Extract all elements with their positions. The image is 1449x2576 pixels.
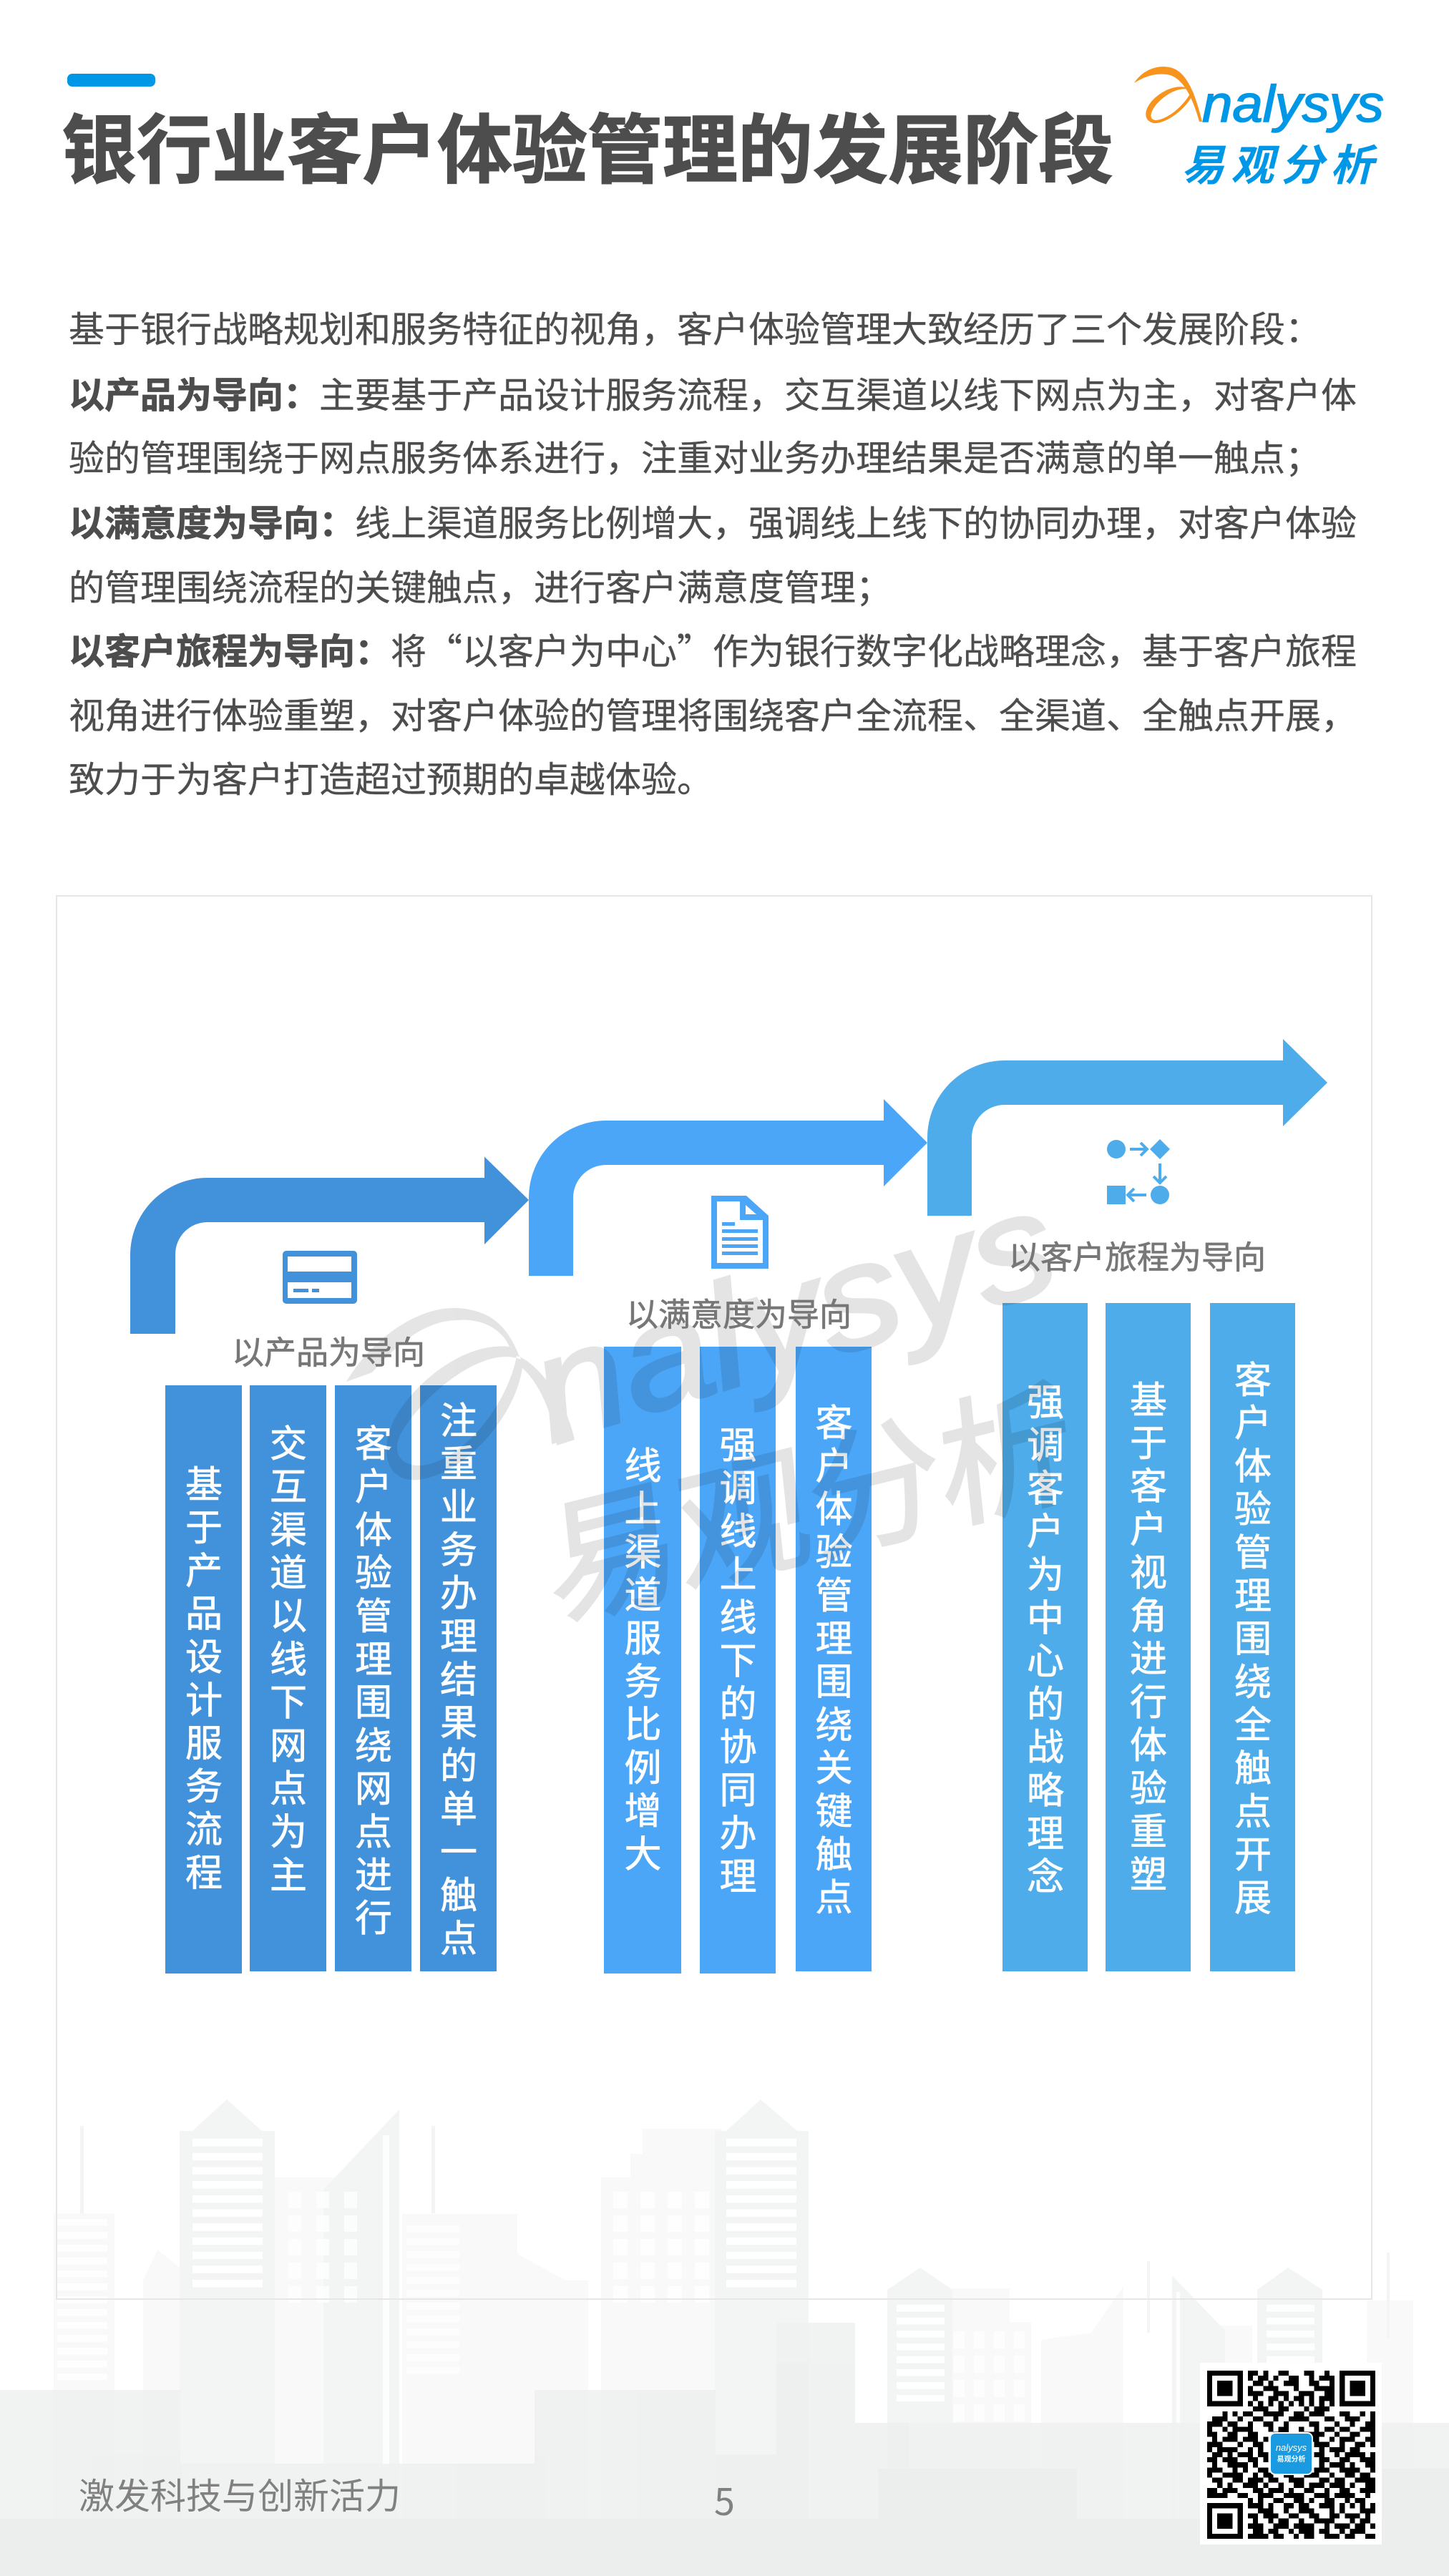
intro text block: 以客户旅程为导向：将“以客户为中心”作为银行数字化战略理念，基于客户旅程	[69, 623, 1357, 675]
intro text block: 视角进行体验重塑，对客户体验的管理将围绕客户全流程、全渠道、全触点开展，	[69, 688, 1357, 739]
bar: 客户体验管理围绕网点进行	[335, 1385, 411, 1971]
bar: 基于产品设计服务流程	[165, 1385, 242, 1974]
accent bar	[67, 74, 155, 87]
bar: 强调客户为中心的战略理念	[1002, 1303, 1088, 1971]
bar: 客户体验管理围绕网点进行: 客户体验管理围绕网点进行	[346, 1424, 401, 1942]
page number: 5	[714, 2472, 735, 2526]
bar: 基于产品设计服务流程: 基于产品设计服务流程	[177, 1465, 230, 1896]
bars: stage 2	[604, 1347, 872, 1974]
intro text block: 致力于为客户打造超过预期的卓越体验。	[69, 751, 713, 803]
intro text block: 验的管理围绕于网点服务体系进行，注重对业务办理结果是否满意的单一触点；	[69, 430, 1321, 482]
QR centre logo	[1271, 2434, 1312, 2474]
icon: card	[283, 1251, 357, 1304]
intro text block: 的管理围绕流程的关键触点，进行客户满意度管理；	[69, 560, 892, 611]
title: 银行业客户体验管理的发展阶段	[62, 90, 1113, 199]
logo: Analysys 易观分析	[1134, 67, 1384, 193]
panel: development stages frame	[56, 895, 1372, 2300]
logo: Analysys 易观分析: 易观分析	[1181, 131, 1378, 193]
bar: 线上渠道服务比例增大	[604, 1347, 681, 1974]
icon: document	[711, 1196, 769, 1269]
label: 以产品为导向: 以产品为导向	[232, 1327, 425, 1373]
bar: 交互渠道以线下网点为主: 交互渠道以线下网点为主	[262, 1424, 315, 1898]
label: 以满意度为导向: 以满意度为导向	[626, 1289, 852, 1335]
bar: 基于客户视角进行体验重塑: 基于客户视角进行体验重塑	[1122, 1380, 1175, 1898]
QR centre logo: nalysys	[1276, 2442, 1307, 2453]
bar: 强调客户为中心的战略理念: 强调客户为中心的战略理念	[1019, 1382, 1072, 1901]
icon: process flow	[1107, 1139, 1170, 1204]
bar: 基于客户视角进行体验重塑	[1106, 1303, 1191, 1971]
intro text block: 基于银行战略规划和服务特征的视角，客户体验管理大致经历了三个发展阶段：	[69, 301, 1321, 353]
label: 以客户旅程为导向: 以客户旅程为导向	[1008, 1231, 1266, 1278]
intro text block	[69, 301, 1357, 803]
bar: 强调线上线下的协同办理	[700, 1347, 776, 1974]
logo: Analysys 易观分析: nalysys	[1202, 76, 1384, 133]
bar: 客户体验管理围绕关键触点	[796, 1347, 872, 1971]
QR code	[1200, 2363, 1382, 2545]
bar: 注重业务办理结果的单一触点	[420, 1385, 497, 1971]
watermark: nalysys	[512, 1159, 1073, 1473]
bar: 强调线上线下的协同办理: 强调线上线下的协同办理	[711, 1425, 765, 1900]
bar: 客户体验管理围绕关键触点: 客户体验管理围绕关键触点	[807, 1403, 861, 1921]
bar: 交互渠道以线下网点为主	[250, 1385, 326, 1971]
QR centre logo: 易观分析	[1277, 2453, 1305, 2464]
intro text block: 以产品为导向：主要基于产品设计服务流程，交互渠道以线下网点为主，对客户体	[69, 367, 1357, 419]
bar: 客户体验管理围绕全触点开展: 客户体验管理围绕全触点开展	[1226, 1360, 1279, 1921]
bar: 注重业务办理结果的单一触点: 注重业务办理结果的单一触点	[432, 1401, 485, 1962]
bars: stage 3	[1002, 1303, 1295, 1971]
bar: 线上渠道服务比例增大: 线上渠道服务比例增大	[616, 1446, 670, 1878]
watermark: 易观分析	[536, 1330, 1080, 1658]
footer slogan: 激发科技与创新活力	[79, 2468, 401, 2519]
bars: stage 1	[165, 1385, 497, 1974]
bar: 客户体验管理围绕全触点开展	[1210, 1303, 1295, 1971]
intro text block: 以满意度为导向：线上渠道服务比例增大，强调线上线下的协同办理，对客户体验	[69, 495, 1357, 547]
